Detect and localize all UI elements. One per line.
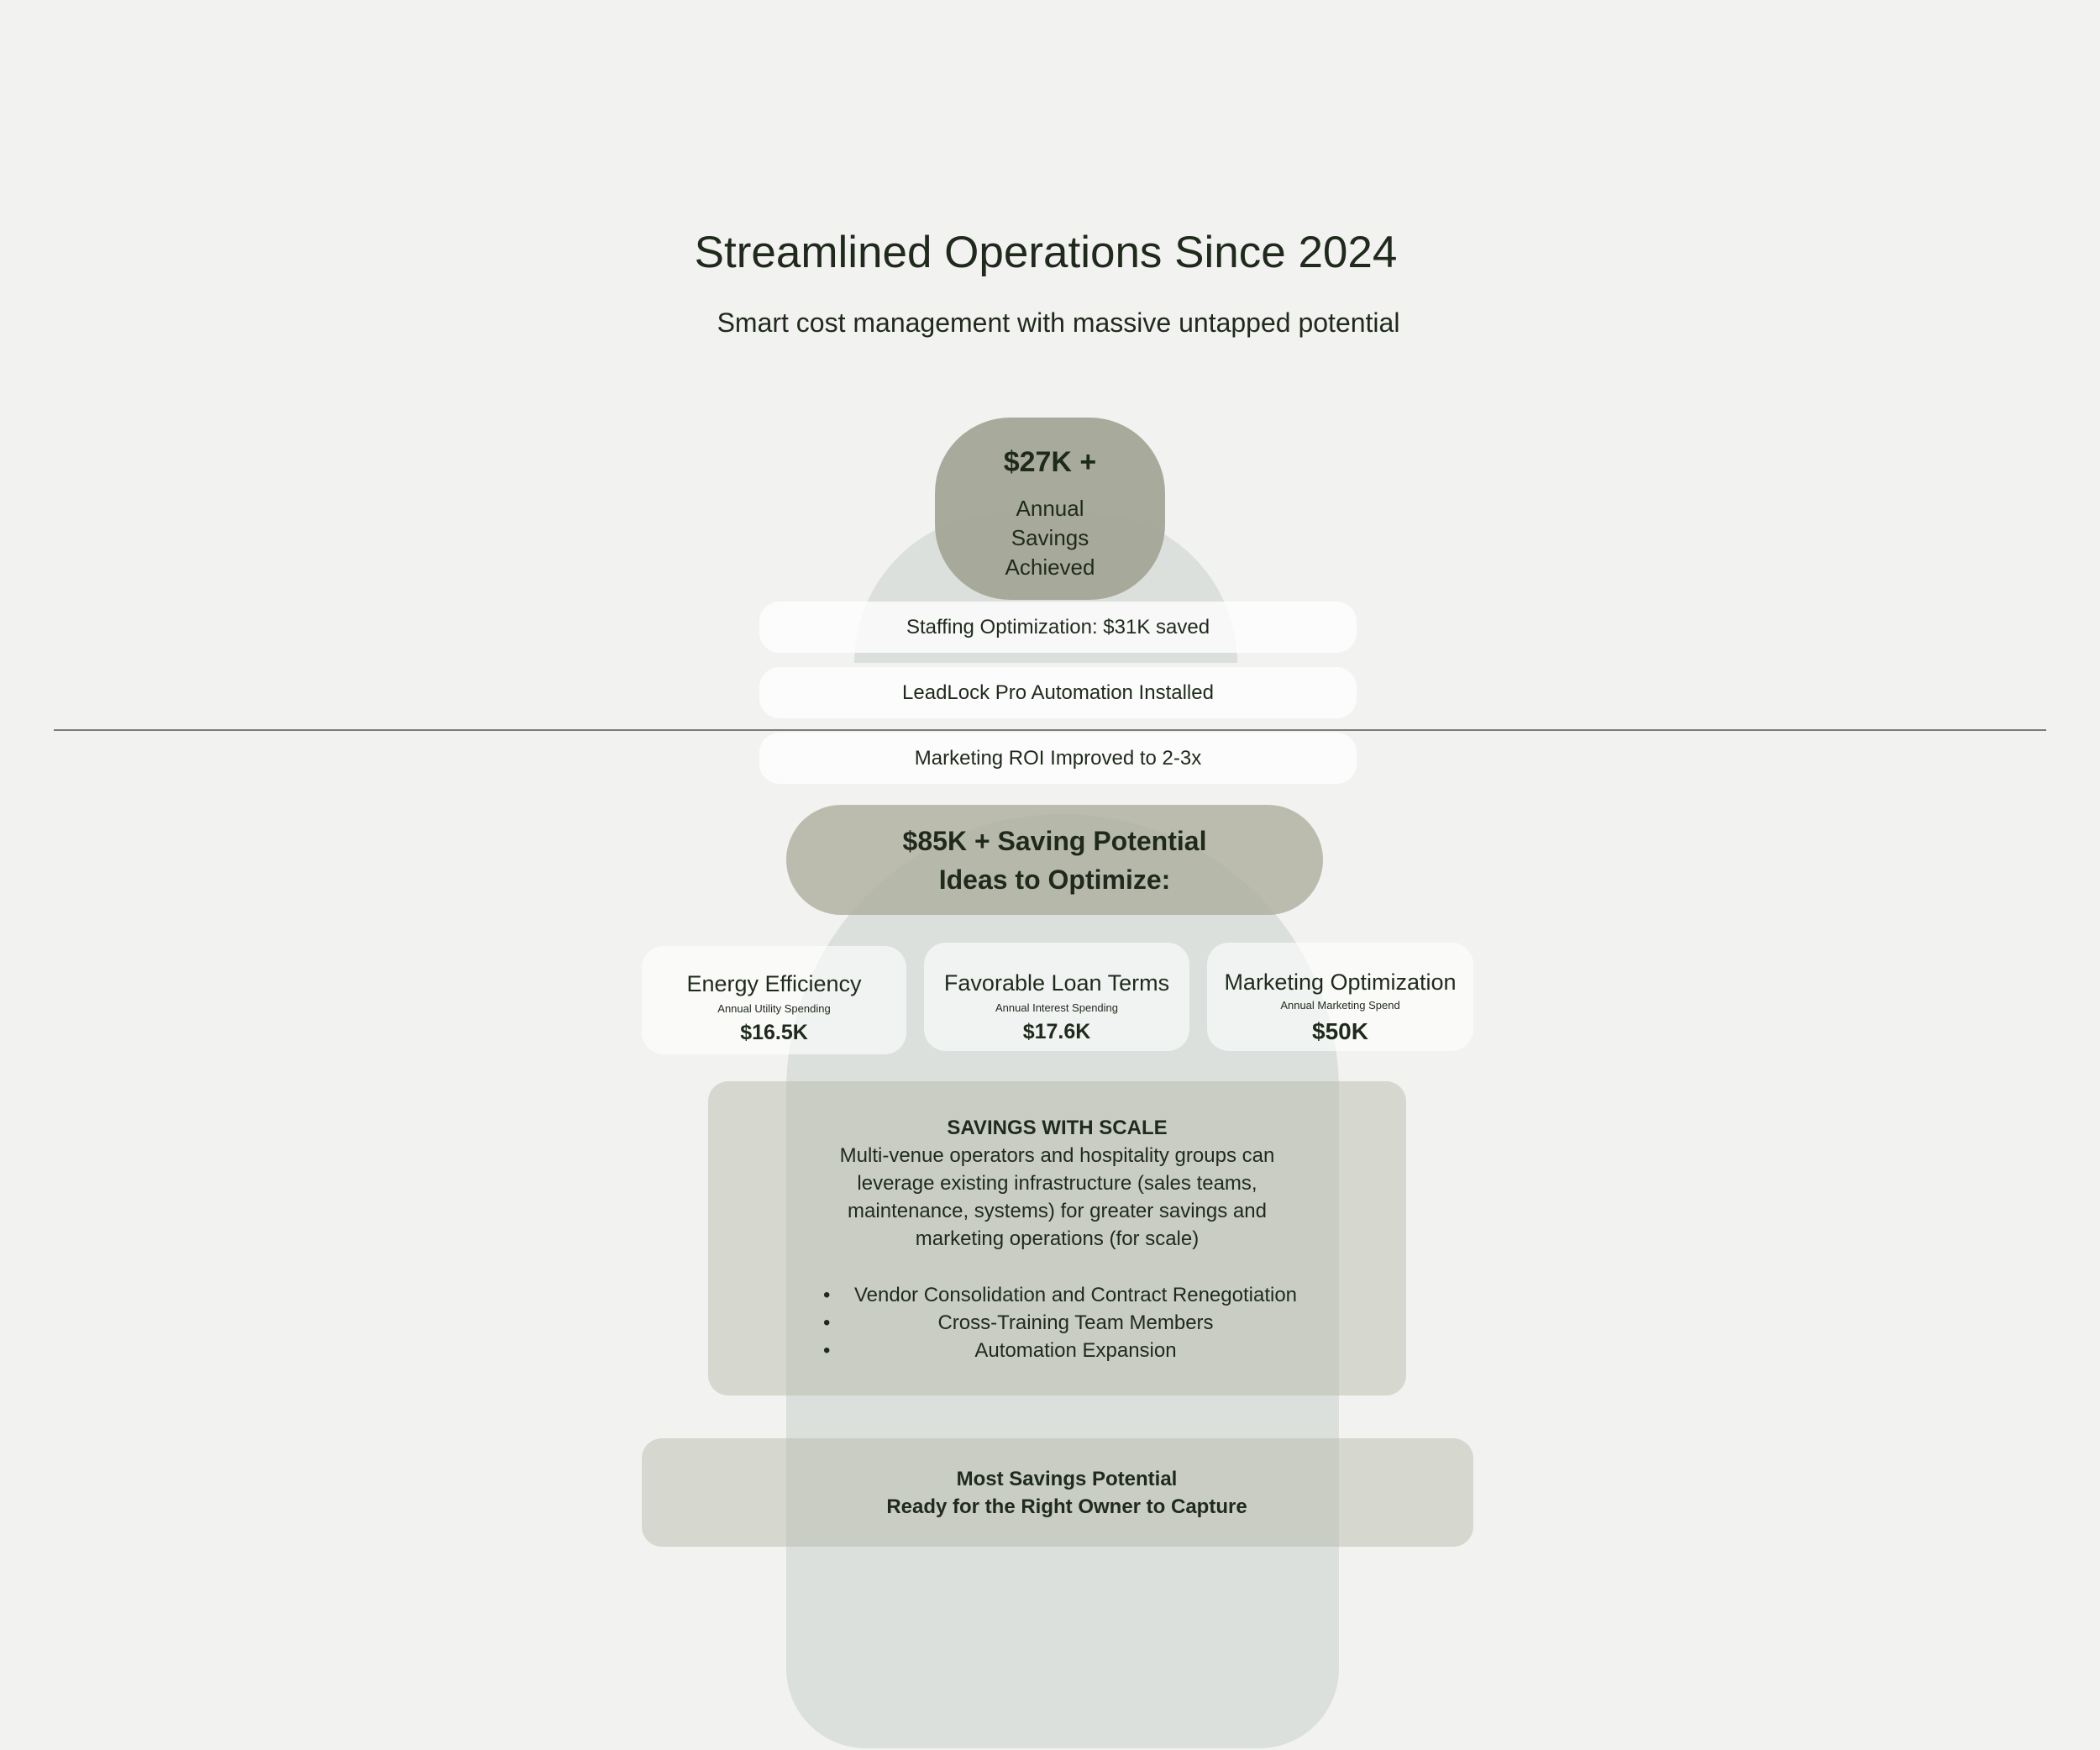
bottom callout — [642, 1438, 1473, 1547]
card: loan terms: Favorable Loan Terms — [944, 970, 1169, 996]
strip: leadlock: LeadLock Pro Automation Installed — [902, 681, 1214, 704]
card: energy efficiency: $16.5K — [740, 1021, 808, 1044]
card: loan terms — [924, 943, 1189, 1051]
strip: marketing ROI: Marketing ROI Improved to 2-3x — [915, 747, 1201, 770]
panel body — [840, 1144, 1274, 1250]
strip: staffing: Staffing Optimization: $31K saved — [906, 616, 1210, 639]
background arch: upper — [854, 513, 1237, 663]
bullet list — [823, 1284, 1297, 1362]
savings label: Annual — [1016, 496, 1084, 521]
savings amount: $27K + — [1004, 446, 1096, 478]
title: Streamlined Operations Since 2024 — [695, 228, 1397, 277]
potential pill: $85K + Saving Potential — [903, 826, 1206, 856]
panel: savings with scale — [708, 1081, 1406, 1395]
bullet list: • — [823, 1339, 830, 1362]
card: energy efficiency: Annual Utility Spending — [717, 1002, 831, 1015]
card: loan terms: $17.6K — [1023, 1020, 1090, 1043]
bullet list: • — [823, 1311, 830, 1334]
card: energy efficiency — [642, 946, 906, 1054]
card: loan terms: Annual Interest Spending — [995, 1001, 1118, 1014]
bottom callout: Most Savings Potential — [957, 1468, 1177, 1490]
bullet list: Vendor Consolidation and Contract Renegotiation — [854, 1284, 1297, 1306]
panel body: maintenance, systems) for greater savings and — [848, 1200, 1267, 1222]
bullet list: Cross-Training Team Members — [937, 1311, 1214, 1334]
panel body: leverage existing infrastructure (sales teams, — [857, 1172, 1257, 1195]
card: energy efficiency: Energy Efficiency — [686, 971, 862, 996]
subtitle: Smart cost management with massive untapped potential — [717, 307, 1399, 338]
bottom callout: Ready for the Right Owner to Capture — [886, 1495, 1247, 1518]
panel heading: SAVINGS WITH SCALE — [947, 1117, 1168, 1139]
potential pill: Ideas to Optimize: — [939, 864, 1170, 895]
savings label — [1005, 496, 1095, 580]
panel body: Multi-venue operators and hospitality groups can — [840, 1144, 1274, 1167]
strip: marketing ROI — [759, 733, 1357, 784]
top pill: annual savings achieved — [935, 418, 1165, 600]
savings label: Savings — [1011, 525, 1089, 550]
strip: leadlock — [759, 667, 1357, 718]
bullet list: Automation Expansion — [974, 1339, 1177, 1362]
card: marketing optimization: Annual Marketing Spend — [1280, 999, 1400, 1012]
savings label: Achieved — [1005, 554, 1095, 580]
background arch: lower — [786, 814, 1339, 1748]
card: marketing optimization: Marketing Optimization — [1224, 970, 1457, 995]
divider line — [54, 729, 2046, 731]
card: marketing optimization: $50K — [1312, 1018, 1368, 1044]
bullet list: • — [823, 1284, 830, 1306]
potential pill — [786, 805, 1323, 915]
panel body: marketing operations (for scale) — [916, 1227, 1199, 1250]
strip: staffing — [759, 602, 1357, 653]
card: marketing optimization — [1207, 943, 1473, 1051]
